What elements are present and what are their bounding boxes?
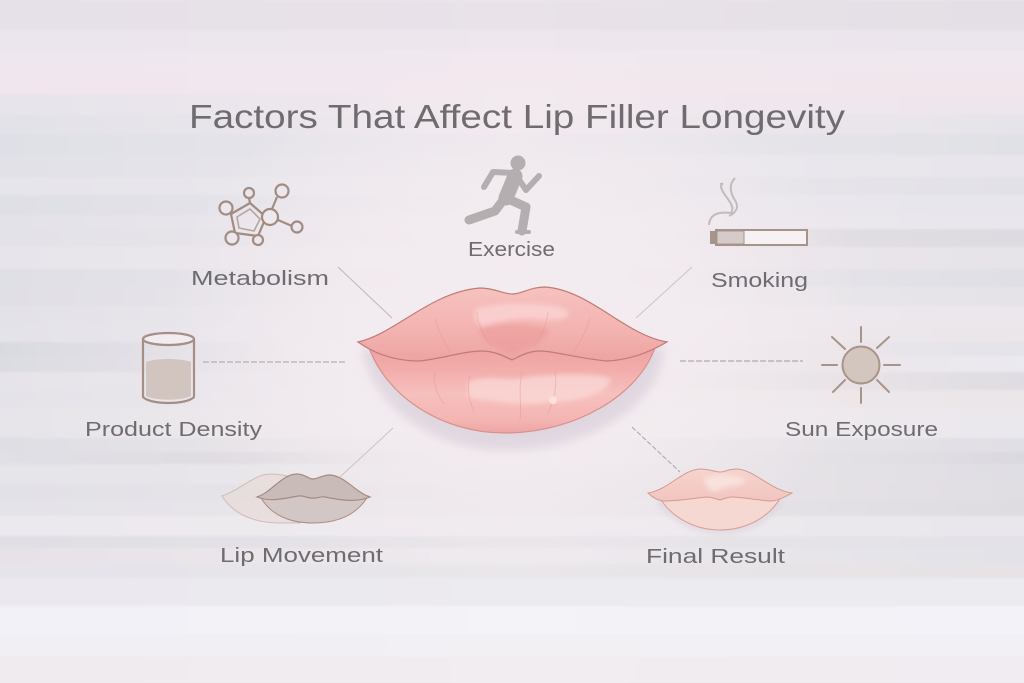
shadow: [655, 500, 785, 535]
lip shadow: [362, 348, 664, 450]
icon: cigarette (smoking): [709, 178, 807, 245]
smoke: [709, 178, 737, 225]
label: Sun Exposure: Sun Exposure: [785, 419, 938, 441]
lower lip: [658, 495, 782, 530]
filter: [717, 231, 744, 244]
lower lip highlight: [468, 374, 610, 404]
upper lip: [358, 287, 667, 361]
icon: lips in motion (lip movement): [222, 474, 370, 523]
front lower lip: [260, 496, 368, 523]
label: Product Density: Product Density: [85, 419, 262, 441]
connector: smoking to lips: [636, 267, 692, 318]
upper lip creases: [435, 312, 590, 352]
icon: molecule (metabolism): [220, 184, 302, 245]
highlight: [705, 475, 746, 492]
lip glint: [549, 396, 557, 404]
upper lip centre shade: [478, 324, 550, 354]
connector: lip movement to lips: [340, 428, 393, 477]
ghost lips: [222, 474, 300, 523]
lower lip: [368, 345, 656, 433]
connector: final result to lips: [632, 427, 680, 472]
lower lip creases: [434, 372, 556, 420]
upper lip highlight: [475, 304, 569, 326]
title: Factors That Affect Lip Filler Longevity: [189, 98, 846, 135]
label: Smoking: Smoking: [711, 270, 808, 292]
label: Lip Movement: Lip Movement: [220, 545, 384, 567]
icon: runner (exercise): [469, 156, 539, 232]
label: Exercise: Exercise: [468, 239, 555, 261]
connector: metabolism to lips: [338, 267, 392, 318]
icon: sun (sun exposure): [822, 327, 900, 403]
label: Final Result: Final Result: [646, 546, 786, 568]
cigarette body: [716, 230, 807, 245]
icon: natural lips (final result): [648, 469, 792, 535]
glass outline: [143, 339, 194, 403]
upper lip: [648, 469, 792, 501]
label: Metabolism: Metabolism: [191, 268, 329, 290]
main lips illustration: [358, 287, 667, 450]
connector: sun exposure to lips: [680, 360, 803, 362]
front upper lip: [257, 474, 370, 500]
liquid: [146, 359, 191, 400]
ash tip: [710, 231, 716, 244]
connector: product density to lips: [203, 361, 347, 363]
icon: glass (product density): [143, 333, 194, 403]
